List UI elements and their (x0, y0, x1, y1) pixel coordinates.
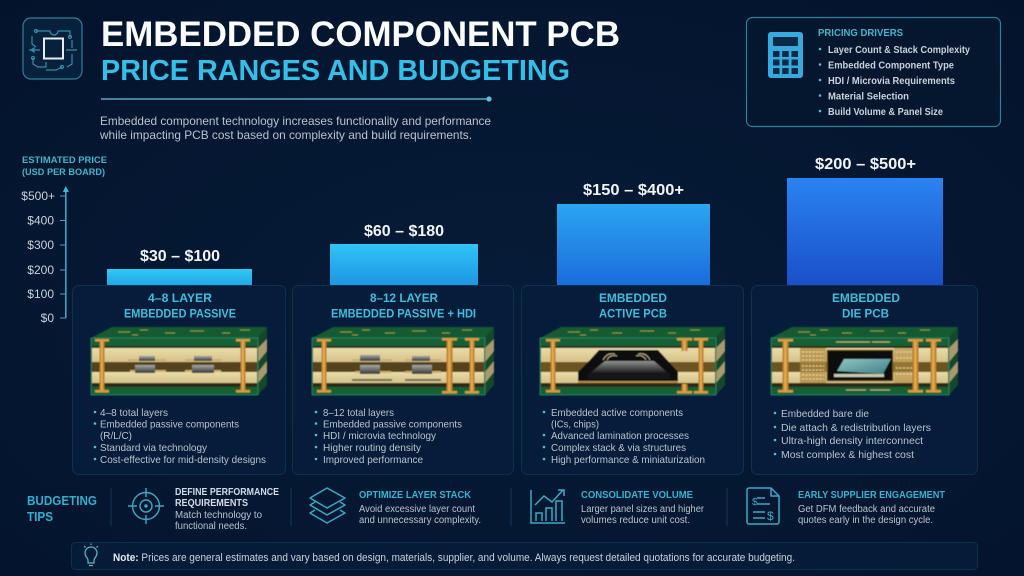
feature list: Most complex & highest cost (781, 449, 914, 461)
panel: 4-8 layer embedded passive (72, 286, 286, 474)
pricing drivers list: Layer Count & Stack Complexity (828, 45, 970, 56)
bar 4: $200 – $500+ (815, 156, 916, 173)
bar 3: $150 – $400+ (583, 182, 684, 199)
tip text: volumes reduce unit cost. (581, 515, 690, 526)
heading: EMBEDDED PASSIVE (124, 306, 236, 320)
header icon: embedded chip (23, 18, 82, 79)
price axis: $400 (27, 214, 54, 228)
heading (124, 291, 236, 320)
pcb cross-section (91, 327, 267, 395)
pricing drivers heading: PRICING DRIVERS (818, 28, 903, 39)
icon: quote document: $ (767, 509, 774, 523)
feature list: Embedded bare die (781, 408, 869, 420)
feature list (315, 407, 462, 466)
bar 1: $30 – $100 (140, 248, 220, 265)
price axis: $0 (41, 311, 54, 325)
note bar (72, 542, 978, 570)
tip text: Get DFM feedback and accurate (798, 504, 936, 515)
tip: define performance requirements (128, 487, 279, 532)
budgeting tips heading: TIPS (27, 510, 53, 524)
panel: 8-12 layer embedded passive + HDI (292, 286, 514, 474)
subtitle: Embedded component technology increases functionality and performance (100, 114, 491, 128)
heading: EMBEDDED PASSIVE + HDI (331, 306, 476, 320)
panel: pricing drivers (746, 18, 1000, 126)
panel: embedded active PCB (522, 286, 744, 474)
tip text: quotes early in the design cycle. (798, 515, 933, 526)
panel: embedded die PCB (752, 286, 978, 474)
tip text: Match technology to (175, 510, 263, 521)
heading: ACTIVE PCB (599, 306, 667, 320)
heading (599, 291, 667, 320)
feature list: Embedded passive components (100, 418, 239, 430)
feature list: Cost-effective for mid-density designs (100, 454, 266, 466)
price axis: $500+ (21, 189, 55, 203)
tip text: functional needs. (175, 521, 247, 532)
bar 1 (107, 248, 252, 286)
feature list: Die attach & redistribution layers (781, 422, 931, 434)
title (101, 15, 620, 87)
icon: layers (310, 488, 345, 523)
feature list: 4–8 total layers (100, 407, 168, 419)
feature list: Embedded active components (551, 407, 683, 419)
tip text (798, 490, 945, 526)
feature list: High performance & miniaturization (551, 454, 705, 466)
icon: calculator (768, 32, 803, 78)
tip text: EARLY SUPPLIER ENGAGEMENT (798, 490, 945, 501)
icon: quote document (747, 488, 779, 524)
feature list: Embedded passive components (323, 418, 462, 430)
heading (331, 291, 476, 320)
pricing drivers list: Build Volume & Panel Size (828, 107, 943, 118)
title: EMBEDDED COMPONENT PCB (101, 15, 620, 54)
feature list: (R/L/C) (100, 430, 132, 442)
tip text (359, 490, 481, 526)
bar 3 (557, 182, 710, 286)
pricing drivers list: HDI / Microvia Requirements (828, 76, 955, 87)
price axis: $200 (27, 263, 54, 277)
heading: EMBEDDED (599, 291, 667, 305)
pcb cross-section (540, 327, 725, 395)
tip text (175, 487, 279, 532)
bar 2: $60 – $180 (364, 223, 444, 240)
budgeting tips heading: BUDGETING (27, 494, 97, 508)
heading: DIE PCB (842, 306, 889, 320)
tip: optimize layer stack (310, 488, 481, 526)
subtitle (99, 114, 491, 142)
feature list: Higher routing density (323, 442, 422, 454)
feature list (774, 408, 931, 461)
pricing drivers list (819, 45, 970, 118)
header rule (101, 96, 492, 102)
heading: 8–12 LAYER (370, 291, 438, 305)
pricing drivers list: Embedded Component Type (828, 60, 954, 72)
price axis: $300 (27, 238, 54, 252)
icon: light bulb (84, 544, 98, 566)
bar 2 (330, 223, 478, 286)
tip text: CONSOLIDATE VOLUME (581, 490, 693, 501)
icon: quote document: $ (752, 497, 758, 508)
heading: 4–8 LAYER (148, 291, 212, 305)
icon: growth chart (531, 490, 565, 523)
heading (832, 291, 900, 320)
tip text: and unnecessary complexity. (359, 515, 481, 526)
axis title (22, 155, 107, 178)
feature list: 8–12 total layers (323, 407, 394, 419)
note text: Note: Prices are general estimates and vary based on design, materials, supplier, and volume. Always request detailed quotations for accurate budgeting. (113, 552, 795, 564)
tip: early supplier engagement (747, 488, 945, 526)
feature list: Advanced lamination processes (551, 430, 689, 442)
axis title: ESTIMATED PRICE (22, 155, 107, 166)
tip text: REQUIREMENTS (175, 498, 248, 509)
tip text: Larger panel sizes and higher (581, 504, 705, 515)
feature list: Improved performance (323, 454, 423, 466)
feature list (94, 407, 266, 466)
icon: target (128, 488, 164, 524)
feature list: (ICs, chips) (551, 418, 599, 430)
feature list: HDI / microvia technology (323, 430, 437, 442)
feature list (543, 407, 705, 466)
feature list: Standard via technology (100, 442, 208, 454)
tip text (581, 490, 705, 526)
pricing drivers list: Material Selection (828, 92, 909, 102)
tip text: Avoid excessive layer count (359, 504, 475, 515)
pcb cross-section (771, 327, 958, 395)
tip text: DEFINE PERFORMANCE (175, 487, 279, 498)
subtitle: while impacting PCB cost based on complexity and build requirements. (99, 128, 472, 142)
axis title: (USD PER BOARD) (22, 167, 105, 178)
budgeting tips heading (27, 494, 97, 524)
price axis (21, 186, 69, 325)
tip: consolidate volume (531, 490, 705, 526)
price axis: $100 (27, 287, 54, 301)
heading: EMBEDDED (832, 291, 900, 305)
title: PRICE RANGES AND BUDGETING (101, 55, 570, 87)
feature list: Complex stack & via structures (551, 442, 686, 454)
feature list: Ultra-high density interconnect (781, 435, 923, 447)
bar 4 (787, 156, 943, 286)
tip text: OPTIMIZE LAYER STACK (359, 490, 471, 501)
pcb cross-section (312, 327, 494, 395)
